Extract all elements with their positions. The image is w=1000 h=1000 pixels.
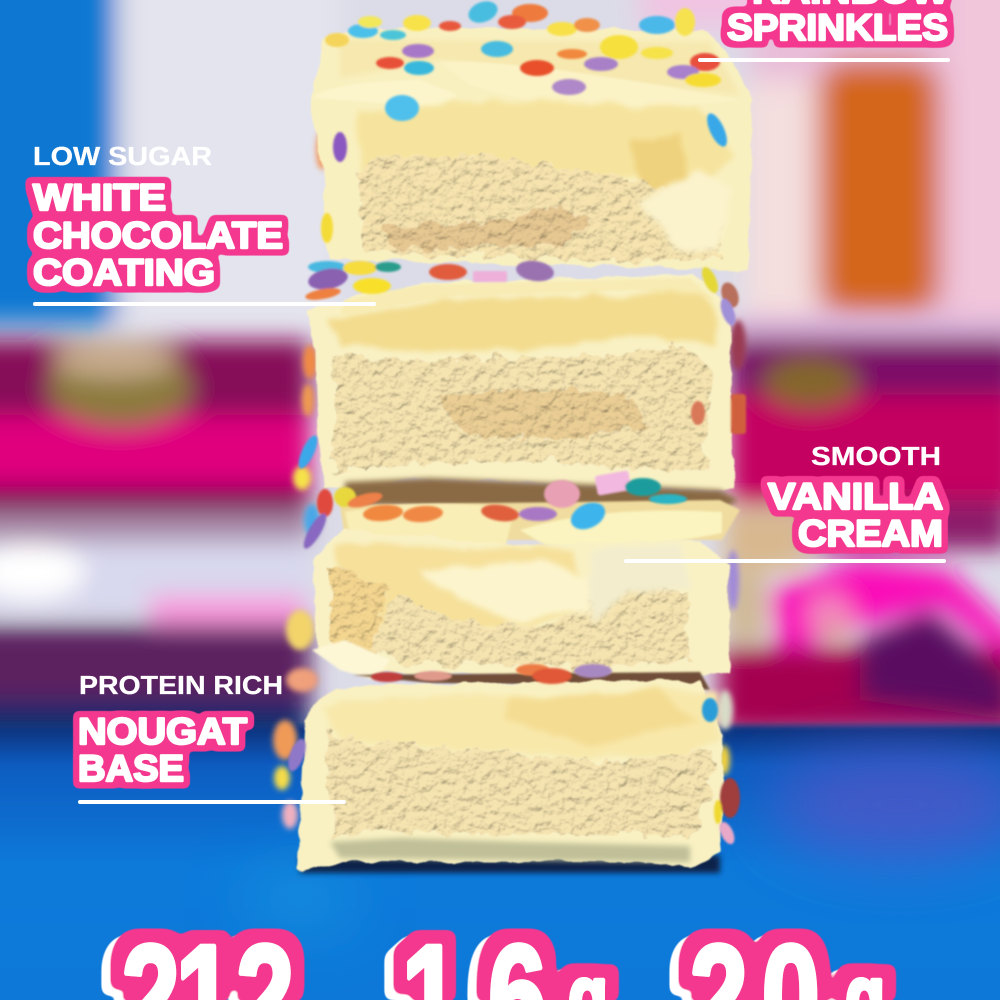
callout: rainbow sprinkles: [698, 0, 950, 62]
eyebrow: smooth: SMOOTH: [811, 441, 941, 471]
leader line: rainbow sprinkles: [698, 58, 950, 62]
eyebrow: low sugar: LOW SUGAR: [33, 141, 212, 171]
callout heading: nougat base: BASE: [78, 748, 184, 789]
callout: white chocolate coating: [33, 141, 376, 306]
callout heading: nougat base: [78, 711, 247, 789]
leader line: vanilla cream: [624, 559, 946, 563]
rainbow sprinkles on top of the stack: [285, 0, 746, 846]
bar 1 top: [312, 28, 752, 270]
gap and bar 3: [312, 478, 740, 680]
callout: nougat base: [78, 670, 346, 804]
callout heading: white chocolate coating: [33, 177, 283, 293]
callout heading: white chocolate coating: WHITE: [33, 177, 166, 218]
leader line: nougat base: [78, 800, 346, 804]
callout: vanilla cream: [624, 441, 946, 563]
callout heading: nougat base: NOUGAT: [78, 711, 247, 752]
callout heading: vanilla cream: CREAM: [798, 513, 943, 554]
out-of-focus sprinkles behind the stack: [273, 130, 746, 829]
stat: 20g: [690, 915, 885, 1000]
leader line: white chocolate coating: [33, 302, 376, 306]
callout heading: vanilla cream: VANILLA: [768, 476, 943, 517]
callout heading: white chocolate coating: CHOCOLATE: [33, 215, 283, 256]
eyebrow: protein rich: PROTEIN RICH: [79, 670, 283, 700]
stats row: [122, 915, 885, 1000]
protein bar stack: [297, 28, 752, 872]
callout heading: vanilla cream: [768, 476, 943, 554]
bar 4: [297, 672, 724, 872]
callout heading: rainbow sprinkles: SPRINKLES: [727, 7, 948, 48]
callout heading: white chocolate coating: COATING: [33, 252, 215, 293]
bar 2: [307, 275, 734, 490]
